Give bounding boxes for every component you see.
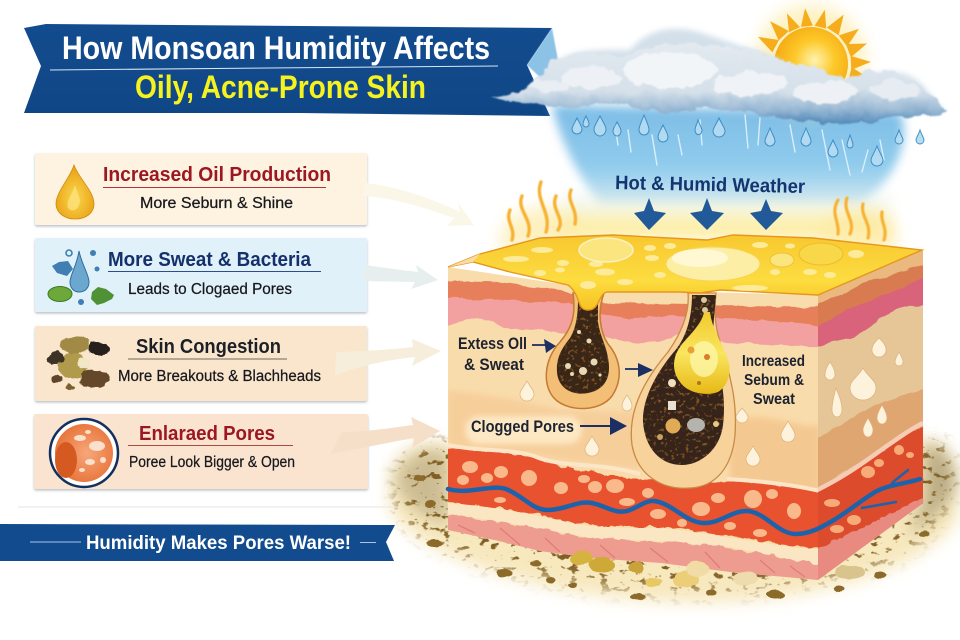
fat blobs: [457, 461, 801, 537]
oil layer on top: [448, 235, 922, 310]
label: excess oil and sweat: & Sweat: [464, 356, 524, 374]
label: increased sebum and sweat: [742, 353, 805, 408]
banner text: Humidity Makes Pores Warse!: [86, 532, 351, 554]
heading: Skin Congestion: [136, 336, 281, 358]
blood vessel: [448, 470, 920, 534]
icon: heat waves right: [835, 198, 885, 240]
red fat layer: [440, 447, 825, 548]
icon: sun: [755, 5, 871, 115]
label: excess oil and sweat: [458, 335, 527, 374]
right face layers: [815, 245, 927, 585]
label: increased sebum and sweat: Sebum &: [744, 372, 804, 389]
subtext: Poree Look Bigger & Open: [129, 454, 295, 471]
title line 1: How Monsoan Humidity Affects: [62, 30, 490, 66]
subtext: More Breakouts & Blachheads: [118, 368, 321, 385]
front face layers: [448, 267, 818, 580]
arrow: pointing to second pore: [625, 363, 653, 377]
label: increased sebum and sweat: Increased: [742, 353, 805, 370]
lower dermis shade: [448, 390, 640, 470]
subtext: More Seburn & Shine: [140, 195, 293, 212]
skin cross-section block: [440, 235, 927, 585]
icon: storm cloud: [493, 29, 947, 123]
arrow: excess oil to pore: [532, 339, 556, 353]
icon: oil drop: [56, 165, 94, 219]
pebbles at block base: [570, 551, 864, 588]
notch haze beside banner: [527, 28, 558, 80]
ground: soil and debris: [390, 440, 958, 602]
arrow: sweat to skin: [362, 265, 438, 289]
arrow: oil production to skin: [362, 183, 474, 226]
sebum plug: [674, 312, 730, 394]
icon: enlarged pore circle: [50, 419, 118, 487]
panel: skin congestion: [35, 326, 367, 401]
panel: more sweat and bacteria: [35, 238, 367, 312]
heading: hot and humid weather: Hot & Humid Weather: [615, 172, 806, 198]
arrow: clogged pores: [580, 417, 627, 435]
heading: More Sweat & Bacteria: [108, 249, 312, 271]
rain drops: [572, 115, 924, 166]
cream droplets: [520, 338, 903, 466]
epidermis red band: [448, 280, 818, 326]
icon: sweat drop and bacteria: [48, 250, 114, 305]
label: excess oil and sweat: Extess Oll: [458, 335, 527, 353]
panel: enlarged pores: [34, 414, 368, 489]
arrows: heat pressing down: [634, 198, 783, 230]
weather haze and rain: [500, 105, 924, 250]
title line 2: Oily, Acne-Prone Skin: [135, 69, 426, 105]
label: clogged pores backing: [465, 416, 582, 444]
epidermis pink band: [440, 297, 825, 347]
rain streaks: [615, 115, 884, 175]
white line: [448, 445, 640, 474]
pink base: [448, 514, 818, 580]
icon: heat waves left: [509, 182, 575, 240]
heading: Enlaraed Pores: [139, 423, 275, 445]
arrow: pores to skin: [330, 417, 440, 454]
cream strip: [448, 503, 820, 565]
label: increased sebum and sweat: Sweat: [753, 391, 795, 408]
debris blobs: [414, 475, 931, 600]
title banner: [24, 24, 552, 116]
icon: debris clump: [47, 336, 110, 391]
bottom banner: [0, 507, 400, 561]
pore: right enlarged clogged pore: [631, 293, 735, 488]
label: clogged pores: Clogged Pores: [471, 417, 574, 436]
heading: Increased Oil Production: [103, 164, 331, 186]
subtext: Leads to Clogaed Pores: [128, 281, 292, 298]
arrow: congestion to skin: [335, 339, 441, 376]
pore: left clogged pore: [546, 293, 619, 409]
panel: increased oil production: [35, 153, 367, 225]
